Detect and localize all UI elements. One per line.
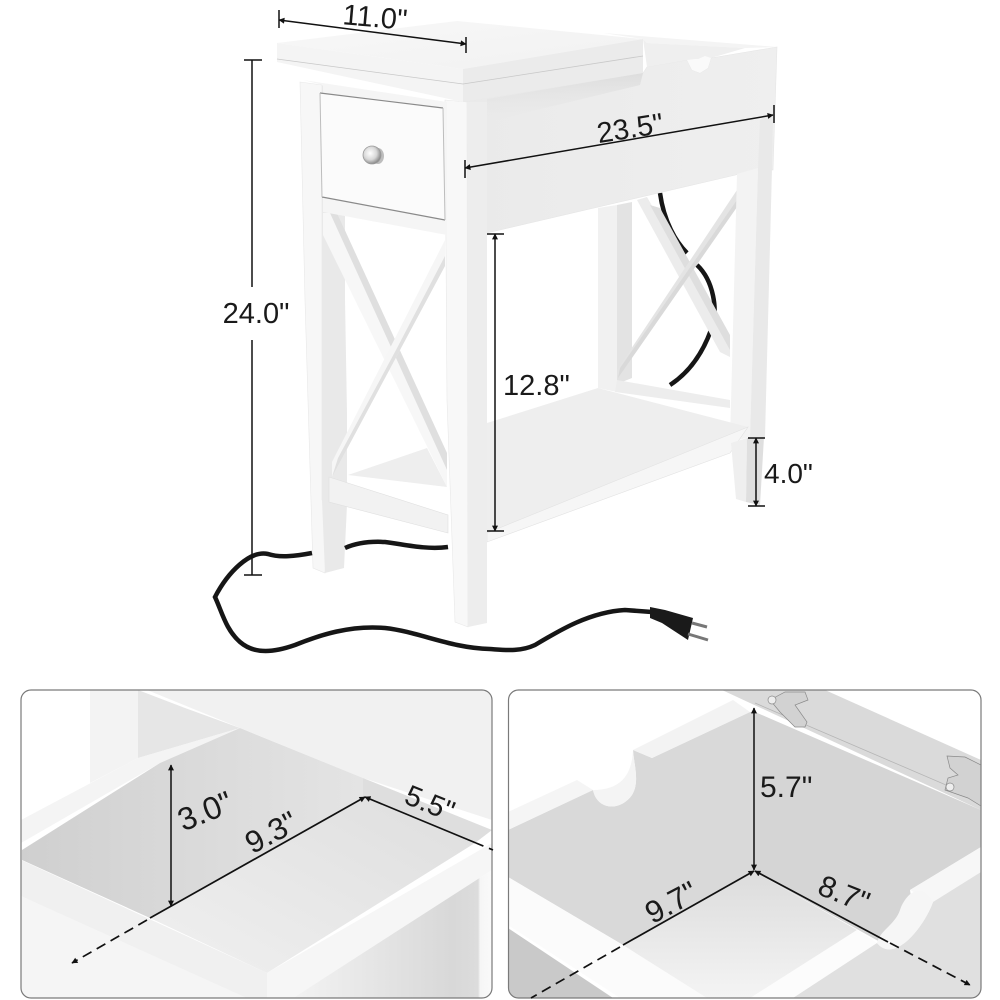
dimension: foot 4.0 <box>748 438 813 506</box>
left side shelf <box>329 448 448 533</box>
drawer dimensions: 3.0" <box>172 784 238 838</box>
dimension: length 23.5: 23.5" <box>595 108 666 150</box>
dimension: height 24.0 <box>223 60 289 575</box>
panel border right <box>508 690 981 998</box>
right end wall <box>793 872 981 998</box>
drawer front faces <box>21 896 247 998</box>
table body side <box>463 47 777 237</box>
dimension: height 24.0: 24.0" <box>223 298 289 330</box>
front power cord <box>215 542 652 651</box>
flip-top lid <box>277 21 643 102</box>
dimension: foot 4.0: 4.0" <box>764 458 813 489</box>
right front leg <box>730 113 773 442</box>
drawer right wall <box>363 778 492 843</box>
drawer back wall <box>22 728 363 918</box>
drawer knob <box>363 146 384 164</box>
drawer front <box>320 93 445 220</box>
front centre leg <box>445 100 487 627</box>
front rim <box>21 860 267 998</box>
compartment floor <box>623 872 857 998</box>
hinged lid underside <box>722 690 981 810</box>
left leg <box>300 82 347 573</box>
right back foot <box>731 437 764 505</box>
dimension: clearance 12.8 <box>487 234 570 531</box>
panel border left <box>21 690 492 998</box>
rear leg and right side frame <box>598 190 737 408</box>
panel: drawer interior <box>21 690 492 998</box>
drawer floor <box>150 797 475 973</box>
right wall with notch <box>755 712 981 942</box>
compartment interior and rim <box>603 33 777 73</box>
lower shelf <box>487 388 748 542</box>
plug <box>650 607 708 640</box>
panel: compartment interior <box>508 690 981 998</box>
dimension: length 23.5 <box>465 105 774 178</box>
notch face <box>593 750 636 806</box>
front rims <box>634 952 696 992</box>
drawer dimensions <box>72 765 493 963</box>
hinge top <box>768 692 808 727</box>
left wall with notch <box>508 712 756 945</box>
compartment dimensions <box>531 708 970 998</box>
dimension: width 11.0: 11.0" <box>341 0 409 37</box>
drawer surround <box>303 80 447 235</box>
drawer dimensions: 9.3" <box>239 804 303 861</box>
compartment dimensions: 9.7" <box>639 874 703 931</box>
drawer dimensions: 5.5" <box>400 780 459 828</box>
rim on left wall <box>508 780 593 830</box>
dimension: width 11.0 <box>279 0 466 53</box>
hinge right <box>945 756 981 806</box>
rear power cord <box>660 193 715 385</box>
shadow under lid <box>487 73 643 122</box>
compartment dimensions: 5.7" <box>760 771 812 804</box>
compartment dimensions: 8.7" <box>813 869 874 920</box>
table illustration <box>215 21 777 651</box>
dimension: clearance 12.8: 12.8" <box>503 370 570 402</box>
left side X braces <box>323 213 447 487</box>
